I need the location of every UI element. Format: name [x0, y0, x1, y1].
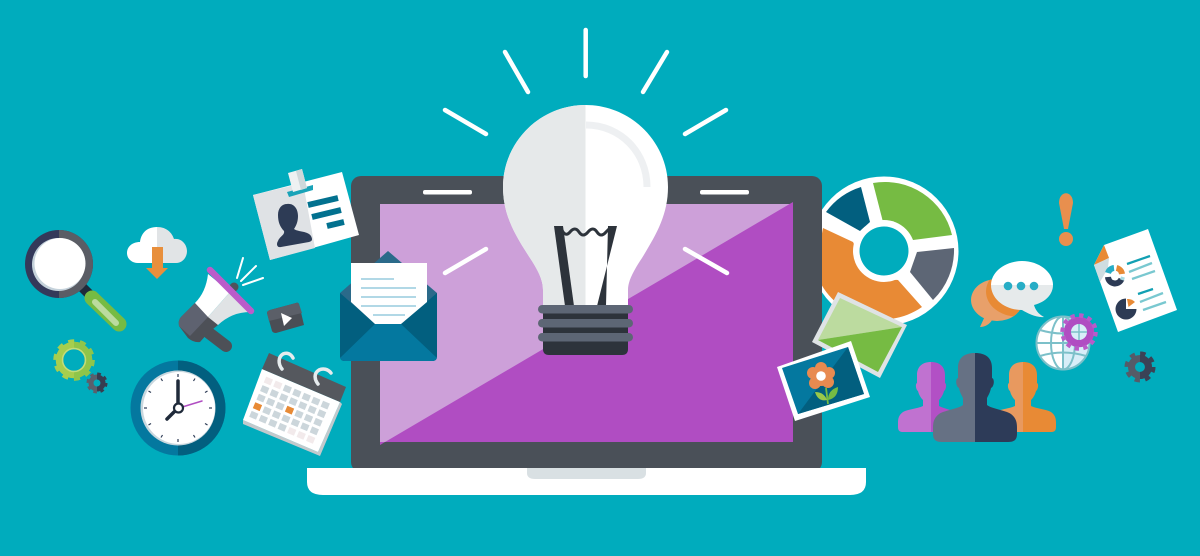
speaker slot right [700, 190, 749, 194]
icon: calendar [243, 353, 346, 456]
badge clip [287, 169, 313, 197]
icon: team of people [898, 353, 1056, 442]
icon: magnifying glass [25, 230, 119, 324]
report lines [1127, 256, 1166, 310]
icon: ID badge [253, 169, 359, 260]
icon: cloud download [127, 227, 187, 279]
bulb highlight [586, 125, 647, 187]
person silhouette [277, 204, 312, 247]
icon: envelope [340, 251, 437, 361]
laptop base [307, 468, 866, 495]
filament [554, 226, 617, 306]
sound lines [237, 258, 263, 285]
icon: clock [130, 360, 226, 456]
clock ticks [144, 374, 212, 442]
laptop screen [380, 202, 793, 445]
icon: purple gear [1062, 316, 1096, 348]
icon: settings gear [1126, 354, 1154, 380]
pie chart 1 [1108, 268, 1123, 283]
orange person [995, 362, 1056, 432]
icon: video play [267, 303, 304, 333]
light rays [445, 30, 727, 273]
icon: green photo [812, 292, 907, 378]
bulb screw base [538, 305, 633, 355]
icon: large green gear [56, 342, 92, 378]
bulb glass [503, 105, 668, 305]
light bulb [503, 105, 668, 355]
laptop notch [527, 468, 646, 479]
calendar cells [249, 377, 330, 444]
purple person [898, 362, 955, 432]
clock hands [167, 381, 202, 419]
icon: small dark gear [88, 374, 106, 392]
flower [807, 362, 838, 404]
icon: globe [1036, 316, 1090, 370]
bubble dots [1004, 282, 1038, 290]
bulb shaded half [503, 105, 586, 305]
laptop body [351, 176, 822, 472]
letter [351, 263, 427, 324]
orange bubble [971, 279, 1020, 327]
icon: report document [1094, 229, 1177, 332]
download arrow [146, 247, 168, 279]
pie chart 2 [1116, 298, 1138, 320]
laptop [307, 176, 866, 495]
icon: exclamation mark [1059, 193, 1073, 246]
white bubble [991, 261, 1053, 285]
centre person [933, 353, 1017, 442]
icon: megaphone [179, 258, 263, 346]
icon: flower photo [777, 341, 870, 421]
icon: speech bubbles [971, 261, 1053, 327]
speaker slot left [423, 190, 472, 194]
icon: donut chart [810, 176, 958, 326]
text lines [308, 198, 344, 226]
calendar rings [279, 353, 331, 384]
